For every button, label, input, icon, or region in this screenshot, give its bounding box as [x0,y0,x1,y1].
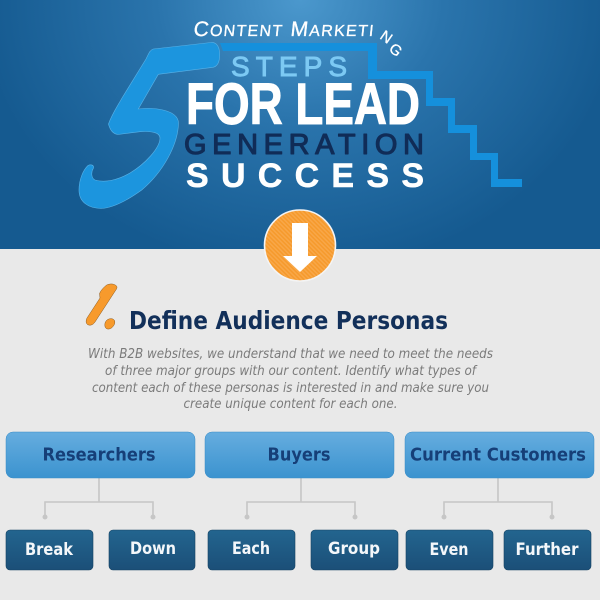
title line: content marketing: CONTENT MARKETI [192,18,375,41]
heading text: Define Audience Personas [129,306,448,335]
intro paragraph: of three major groups with our content. Identify what types of [105,364,478,379]
box: each [208,530,295,570]
box: further [504,530,591,570]
connector [247,478,355,516]
icon: orange numeral 1 [86,284,117,329]
persona group: buyers: Each [232,539,270,559]
persona group: buyers [205,432,398,570]
title line: success: SUCCESS [186,157,424,195]
title line: for lead: FOR LEAD [186,72,420,137]
title line: content marketing: N [377,27,395,47]
icon: staircase [220,43,522,187]
intro paragraph: content each of these personas is interested in and make sure you [92,381,489,396]
persona group: current customers [405,432,594,570]
persona group: researchers: Down [130,539,176,559]
title line: content marketing [192,18,405,61]
box: current customers [405,432,594,478]
persona group: current customers: Current Customers [410,444,586,466]
box: researchers [6,432,195,478]
section heading [86,284,448,335]
intro paragraph [88,347,493,412]
persona group: researchers: Break [25,540,74,560]
persona group: buyers: Buyers [268,444,330,466]
big numeral 5 [79,42,220,209]
intro paragraph: create unique content for each one. [184,397,398,412]
box: even [406,530,493,570]
box: buyers [205,432,394,478]
box: down [109,530,195,570]
persona group: researchers [6,432,195,570]
persona group: researchers: Researchers [42,444,156,466]
box: group [311,530,398,570]
connector [444,478,552,516]
intro paragraph: With B2B websites, we understand that we need to meet the needs [88,347,493,362]
connector [45,478,153,516]
title line: content marketing: G [385,40,405,61]
title line: steps: STEPS [231,51,347,82]
persona group: current customers: Even [430,540,468,560]
header panel [0,0,600,249]
title line: generation: GENERATION [184,129,424,161]
persona group: buyers: Group [328,539,380,559]
persona group: current customers: Further [516,540,579,560]
box: break [6,530,93,570]
icon: orange down arrow badge [264,210,336,281]
